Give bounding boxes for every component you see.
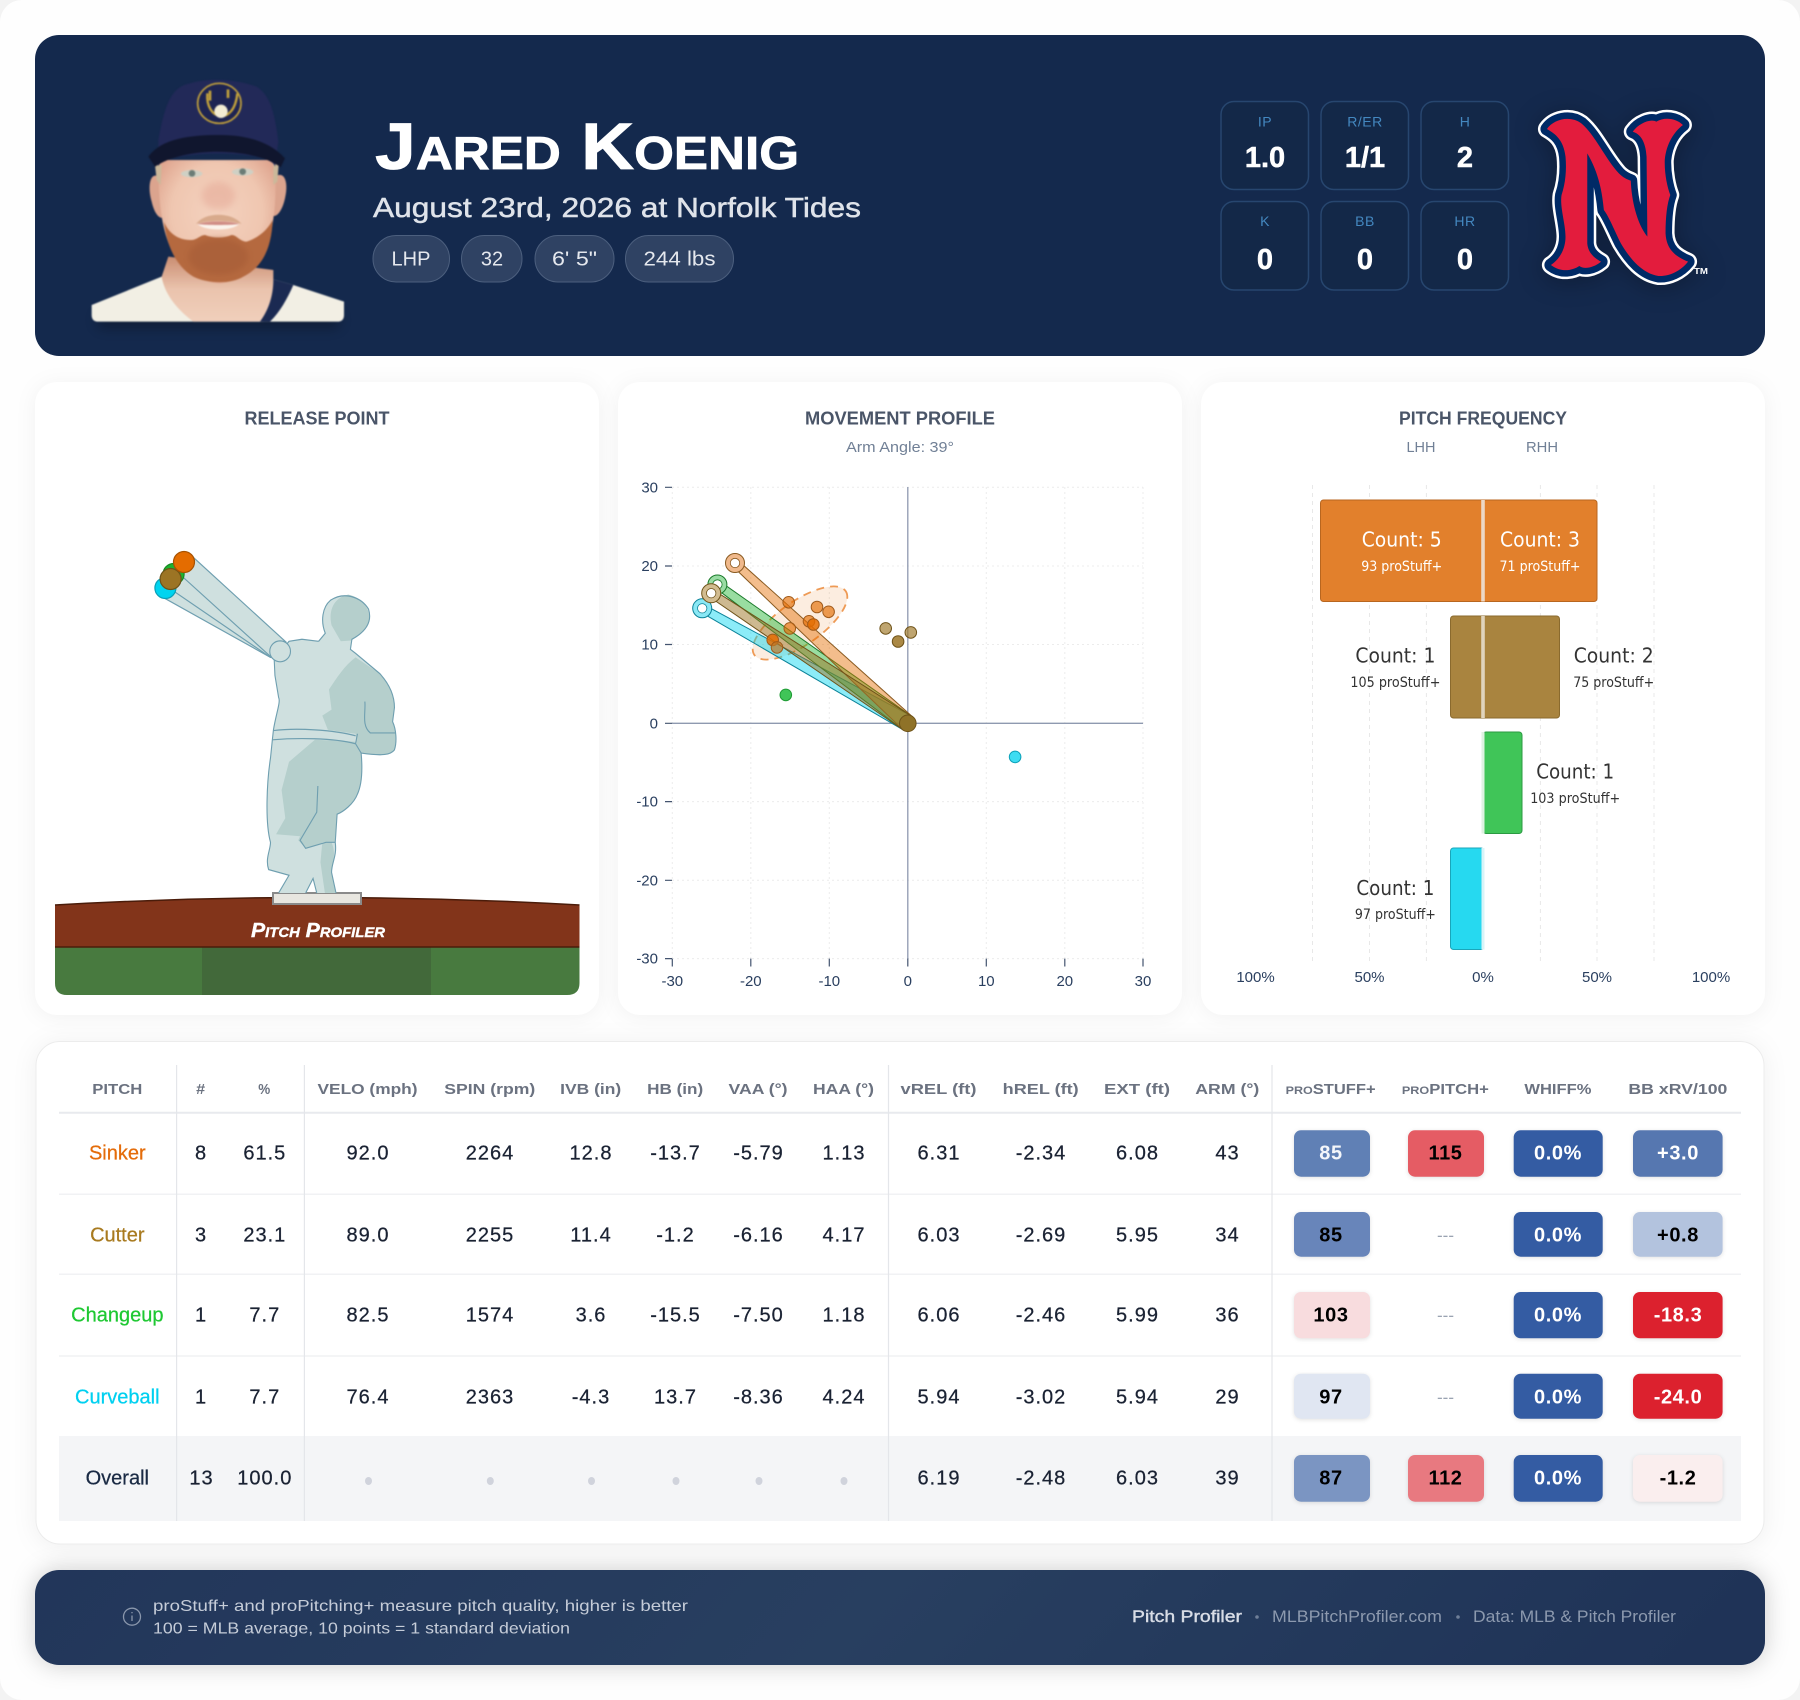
y axis labels: 30 (641, 480, 658, 496)
x axis labels: -20 (740, 973, 762, 990)
table header: HAA (°) (813, 1082, 874, 1098)
table rules (59, 1065, 1741, 1521)
frequency chart (1236, 485, 1730, 986)
row: curveball: 97 (1319, 1387, 1343, 1409)
row: curveball: -3.02 (1016, 1387, 1066, 1409)
row: cutter: --- (1437, 1226, 1454, 1245)
curveball marker (155, 578, 176, 598)
percent axis: 100% (1692, 969, 1730, 986)
overall row background (59, 1436, 1741, 1521)
stat: BB: 0 (1357, 244, 1373, 276)
row: curveball (75, 1374, 1723, 1419)
pill: age: 32 (481, 248, 503, 270)
pill: height (535, 236, 614, 282)
x axis labels (661, 973, 1151, 990)
footer credits: Pitch Profiler (1132, 1608, 1243, 1626)
row: sinker: 2264 (466, 1143, 514, 1165)
row: overall: -1.2 (1660, 1468, 1696, 1490)
player name: Jared Koenig (375, 109, 799, 183)
table header: SPIN (rpm) (444, 1082, 536, 1098)
table header: EXT (ft) (1104, 1082, 1170, 1098)
row: changeup: -18.3 (1654, 1305, 1702, 1327)
x axis labels: 10 (978, 973, 995, 990)
stat: R/ER: 1/1 (1345, 142, 1385, 174)
table header: WHIFF% (1524, 1082, 1592, 1098)
sinker marker (174, 552, 194, 572)
bar: changeup: Count: 1 (1536, 760, 1614, 784)
panel background (36, 1042, 1764, 1544)
row: cutter: -1.2 (656, 1225, 695, 1247)
y axis labels: 10 (641, 636, 658, 654)
percent axis: 100% (1236, 969, 1275, 986)
player photo (92, 80, 344, 328)
row: sinker: -13.7 (650, 1143, 701, 1165)
row: cutter: -6.16 (733, 1225, 784, 1247)
footer credits: Data: MLB & Pitch Profiler (1473, 1608, 1677, 1626)
row: curveball: 29 (1215, 1387, 1240, 1409)
RHH label: RHH (1526, 439, 1558, 456)
bar: sinker: Count: 5 (1362, 528, 1442, 552)
row: cutter: 11.4 (570, 1225, 612, 1247)
LHH label: LHH (1406, 439, 1436, 456)
pill: age (462, 236, 522, 282)
table header: PITCH (92, 1082, 142, 1098)
row: sinker: 6.08 (1116, 1143, 1159, 1165)
row: curveball: 0.0% (1534, 1387, 1582, 1409)
stat: IP: IP (1258, 114, 1272, 130)
heading: MOVEMENT PROFILE (805, 408, 995, 428)
row: cutter: 0.0% (1534, 1225, 1582, 1247)
row: changeup: -7.50 (733, 1305, 784, 1327)
row: cutter: 2255 (466, 1225, 514, 1247)
row: cutter (90, 1212, 1723, 1257)
row: curveball: 5.94 (918, 1387, 960, 1409)
release point markers (155, 552, 194, 598)
tube origin (900, 715, 916, 732)
row: changeup: 82.5 (347, 1305, 389, 1327)
bar: sinker: Count: 3 (1500, 528, 1580, 552)
row: changeup: 1 (195, 1305, 207, 1327)
stat: HR: HR (1454, 213, 1476, 229)
pill: handedness: LHP (392, 248, 430, 270)
row: changeup: -2.46 (1016, 1305, 1066, 1327)
stat: IP (1221, 102, 1308, 190)
row: curveball: --- (1437, 1388, 1454, 1407)
y axis labels: 0 (650, 715, 658, 732)
footer credits (1132, 1608, 1677, 1626)
row: changeup: Changeup (71, 1305, 163, 1327)
sinker confidence ellipse (742, 573, 858, 673)
pitching rubber (273, 893, 361, 904)
row: cutter: 4.17 (823, 1225, 865, 1247)
row: sinker: 6.31 (918, 1143, 960, 1165)
row: sinker: Sinker (89, 1143, 146, 1165)
stat grid (1221, 102, 1508, 290)
bar: cutter (1350, 616, 1654, 718)
row: sinker (89, 1130, 1723, 1177)
row: overall: 87 (1319, 1468, 1343, 1490)
arm angle tube: sinker (726, 554, 913, 729)
y axis labels: -20 (636, 872, 658, 889)
footer note: 100 = MLB average, 10 points = 1 standard deviation (153, 1620, 570, 1638)
row: overall: -2.48 (1016, 1468, 1066, 1490)
row: changeup: 1574 (466, 1305, 514, 1327)
changeup point (780, 689, 792, 701)
sinker points (767, 596, 834, 653)
icon: info (124, 1608, 140, 1625)
stat: BB (1321, 202, 1408, 290)
row: overall: Overall (86, 1468, 149, 1490)
bar: changeup: 103 proStuff+ (1530, 791, 1620, 807)
arm angle tube: cutter (702, 584, 912, 730)
release tubes (162, 557, 290, 662)
table header: BB xRV/100 (1628, 1082, 1727, 1098)
cutter points (880, 623, 917, 647)
percent axis: 0% (1472, 969, 1494, 986)
panel background (35, 382, 599, 1015)
row: sinker: 61.5 (243, 1143, 286, 1165)
curveball point (1009, 751, 1021, 763)
row: sinker: 0.0% (1534, 1143, 1582, 1165)
row: changeup: 7.7 (249, 1305, 280, 1327)
header banner (35, 35, 1765, 356)
bar: cutter: Count: 2 (1574, 644, 1654, 668)
row: changeup: -15.5 (650, 1305, 701, 1327)
row: cutter: Cutter (90, 1225, 145, 1247)
bio pills (373, 236, 734, 282)
stat: HR (1421, 202, 1508, 290)
row: changeup: 103 (1313, 1305, 1349, 1327)
pill: weight: 244 lbs (644, 248, 716, 270)
x axis labels: -30 (661, 973, 683, 990)
heading: RELEASE POINT (244, 408, 390, 428)
row: overall: 100.0 (237, 1468, 292, 1490)
bar: curveball: 97 proStuff+ (1355, 907, 1436, 923)
y axis labels: 20 (641, 558, 658, 575)
stat: BB: BB (1355, 213, 1375, 229)
row: overall: 6.19 (918, 1468, 960, 1490)
arm angle tube: curveball (693, 599, 912, 730)
bar: curveball (1355, 848, 1484, 950)
row: cutter: 3 (195, 1225, 207, 1247)
table header: % (258, 1082, 270, 1098)
footer note (153, 1598, 689, 1638)
mound and grass (55, 893, 580, 995)
y axis labels: -10 (636, 794, 658, 811)
row: cutter: 85 (1319, 1225, 1343, 1247)
pill: weight (626, 236, 734, 282)
stat: HR: 0 (1457, 244, 1473, 276)
stat: K: K (1260, 213, 1270, 229)
game subtitle: August 23rd, 2026 at Norfolk Tides (373, 192, 861, 223)
row: changeup: 36 (1215, 1305, 1240, 1327)
row: sinker: 8 (195, 1143, 207, 1165)
row: overall: 6.03 (1116, 1468, 1159, 1490)
row: cutter: +0.8 (1657, 1225, 1699, 1247)
row: curveball: 2363 (466, 1387, 514, 1409)
bar: cutter: 75 proStuff+ (1573, 675, 1654, 691)
row: curveball: 5.94 (1116, 1387, 1159, 1409)
bar: curveball: Count: 1 (1356, 876, 1434, 900)
row: overall: 13 (189, 1468, 214, 1490)
panel: release point (35, 382, 599, 1015)
movement chart (636, 480, 1151, 990)
row: cutter: 5.95 (1116, 1225, 1159, 1247)
row: sinker: 12.8 (570, 1143, 612, 1165)
x axis labels: 30 (1135, 973, 1151, 990)
stat: K: 0 (1257, 244, 1273, 276)
bar: sinker (1320, 500, 1597, 602)
row: curveball: 76.4 (347, 1387, 389, 1409)
pitcher silhouette (162, 557, 396, 893)
arm angle subtitle: Arm Angle: 39° (846, 439, 954, 456)
stat: K (1221, 202, 1308, 290)
row: curveball: 13.7 (654, 1387, 697, 1409)
stat: H: 2 (1457, 142, 1473, 174)
row: sinker: 92.0 (347, 1143, 389, 1165)
row: cutter: 6.03 (918, 1225, 960, 1247)
row: sinker: -2.34 (1016, 1143, 1066, 1165)
mound (55, 898, 580, 947)
x axis labels: -10 (818, 973, 840, 990)
row: overall (86, 1455, 1723, 1502)
table header: IVB (in) (560, 1082, 621, 1098)
bar: cutter: Count: 1 (1355, 644, 1435, 668)
changeup marker (163, 564, 184, 584)
cutter marker (160, 568, 181, 590)
table header: vREL (ft) (900, 1082, 977, 1098)
row: changeup: --- (1437, 1306, 1454, 1325)
percent axis (1236, 969, 1730, 986)
row: curveball: 1 (195, 1387, 207, 1409)
row: sinker: 43 (1215, 1143, 1240, 1165)
table header: PROSTUFF+ (1286, 1082, 1376, 1098)
team logo: N (1547, 119, 1708, 276)
row: curveball: 7.7 (249, 1387, 280, 1409)
panel: movement profile (618, 382, 1182, 1015)
panel background (1201, 382, 1765, 1015)
row: curveball: -8.36 (733, 1387, 784, 1409)
table header: PROPITCH+ (1402, 1082, 1489, 1098)
row: changeup: 0.0% (1534, 1305, 1582, 1327)
row: curveball: 4.24 (823, 1387, 865, 1409)
x axis labels: 0 (904, 973, 912, 990)
bar: changeup (1482, 732, 1620, 834)
stat: R/ER: R/ER (1347, 114, 1383, 130)
footer credits: MLBPitchProfiler.com (1272, 1608, 1442, 1626)
stat: R/ER (1321, 102, 1408, 190)
mound wordmark: Pitch Profiler (251, 920, 386, 942)
row: curveball: Curveball (75, 1387, 160, 1409)
team logo: N: TM (1694, 267, 1708, 276)
table header: ARM (°) (1195, 1082, 1259, 1098)
row: curveball: -24.0 (1654, 1387, 1702, 1409)
bar: sinker: 93 proStuff+ (1361, 559, 1442, 575)
row: sinker: -5.79 (733, 1143, 784, 1165)
table header: VAA (°) (728, 1082, 788, 1098)
y axis labels (636, 480, 658, 968)
row: changeup (71, 1292, 1723, 1338)
row: overall: 112 (1428, 1468, 1463, 1490)
row: sinker: 115 (1428, 1143, 1463, 1165)
row: sinker: 1.13 (823, 1143, 865, 1165)
row: cutter: -2.69 (1016, 1225, 1066, 1247)
footer (35, 1570, 1765, 1665)
row: cutter: 89.0 (347, 1225, 389, 1247)
row: sinker: 85 (1319, 1143, 1343, 1165)
header background (35, 35, 1765, 356)
footer note: proStuff+ and proPitching+ measure pitch quality, higher is better (153, 1598, 689, 1615)
stat: H: H (1460, 114, 1470, 130)
table header: # (196, 1082, 205, 1098)
table header: hREL (ft) (1003, 1082, 1079, 1098)
heading: PITCH FREQUENCY (1399, 408, 1567, 428)
arm angle tube: changeup (708, 575, 912, 730)
y axis labels: -30 (636, 951, 658, 968)
panel: pitch table (36, 1042, 1764, 1544)
table header: VELO (mph) (318, 1082, 418, 1098)
row: changeup: 5.99 (1116, 1305, 1159, 1327)
grass (55, 945, 580, 995)
row: cutter: 23.1 (243, 1225, 286, 1247)
row: changeup: 3.6 (576, 1305, 606, 1327)
bar: sinker: 71 proStuff+ (1500, 559, 1580, 575)
row: cutter: 34 (1215, 1225, 1240, 1247)
percent axis: 50% (1582, 969, 1612, 986)
pill: height: 6' 5" (552, 248, 597, 270)
footer background (35, 1570, 1765, 1665)
table header: HB (in) (647, 1082, 703, 1098)
stat: H (1421, 102, 1508, 190)
panel background (618, 382, 1182, 1015)
row: overall: 39 (1215, 1468, 1240, 1490)
row: curveball: -4.3 (572, 1387, 610, 1409)
row: changeup: 6.06 (918, 1305, 960, 1327)
stat: IP: 1.0 (1245, 142, 1285, 174)
table header (92, 1082, 1727, 1098)
panel: pitch frequency (1201, 382, 1765, 1015)
bar: cutter: 105 proStuff+ (1350, 675, 1440, 691)
x axis labels: 20 (1056, 973, 1073, 990)
pill: handedness (373, 236, 450, 282)
row: overall: 0.0% (1534, 1468, 1582, 1490)
percent axis: 50% (1354, 969, 1385, 986)
row: sinker: +3.0 (1657, 1143, 1699, 1165)
row: changeup: 1.18 (823, 1305, 865, 1327)
